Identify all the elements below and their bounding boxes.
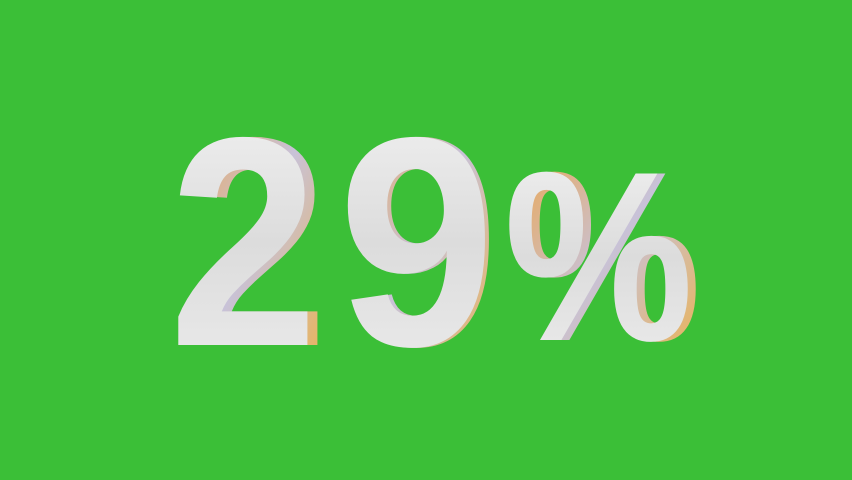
digit 2: 2 <box>169 76 318 409</box>
percent sign: % <box>504 122 693 392</box>
digit 9: 9 <box>342 75 499 409</box>
digit 2: 2 <box>179 76 328 409</box>
percent sign: % <box>512 122 701 392</box>
digit 9: 9 <box>338 75 495 409</box>
